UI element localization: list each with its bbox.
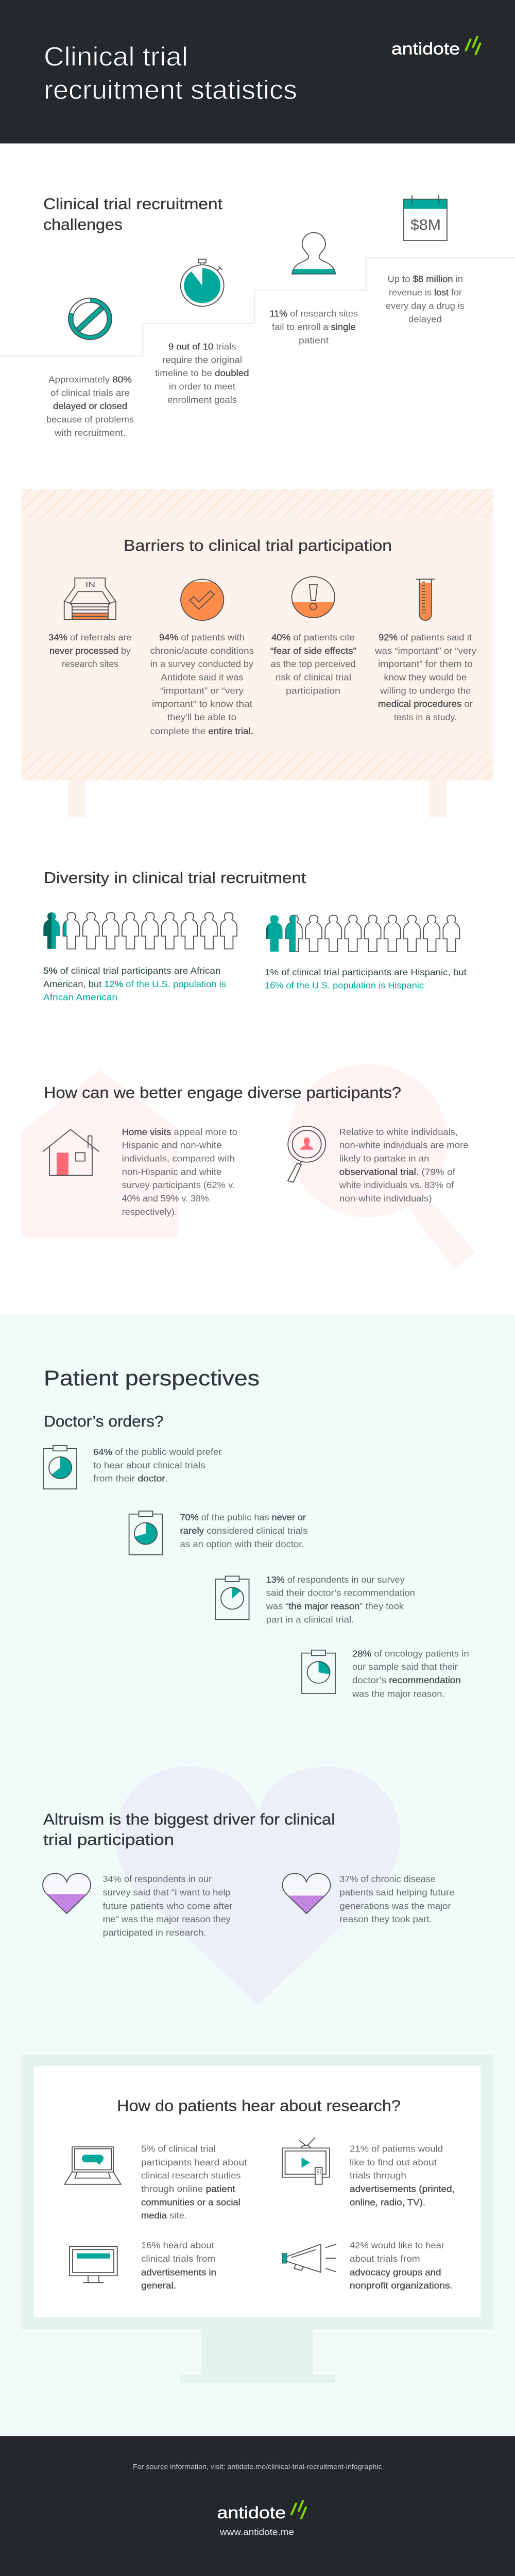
text: 28% of oncology patients: 28% of oncology patients in xyxy=(352,1649,469,1658)
source note: For source information, visit: antidote.me/clinical-trial-recruitment-infographic xyxy=(133,2463,382,2471)
text: observational trial: non-white individuals) xyxy=(339,1193,432,1204)
text: 92% of patients: was “important” or “very xyxy=(374,646,477,656)
text: 9 out of 10 trials: require the original xyxy=(162,355,242,365)
panel: monitor xyxy=(22,2055,493,2383)
text: 5% of participants: clinical research studies xyxy=(141,2171,241,2181)
heading: recruitment challenges: challenges xyxy=(43,216,123,233)
icon: desktop monitor xyxy=(70,2246,117,2283)
heading: hear about research: How do patients hear about research? xyxy=(117,2097,401,2114)
icon: warning circle xyxy=(291,576,335,618)
text: 42% would like: 42% would like to hear xyxy=(350,2241,444,2250)
text: 28% of oncology patients xyxy=(352,1649,469,1699)
icon: inbox tray: IN xyxy=(85,581,95,588)
text: 80% of trials delayed: of clinical trials are xyxy=(50,388,130,398)
heading: altruism: Altruism is the biggest driver for clinical xyxy=(43,1810,335,1828)
text: 34% of respondents: participated in research. xyxy=(103,1927,206,1938)
text: 92% of patients: know they would be xyxy=(384,672,467,682)
text: 80% of trials delayed: because of problems xyxy=(46,414,134,425)
title: recruitment statistics xyxy=(44,75,297,105)
heading: barriers: Barriers to clinical trial participation xyxy=(124,537,392,554)
text: home visits: Home visits appeal more to xyxy=(122,1127,237,1137)
text: home visits: respectively). xyxy=(122,1207,177,1217)
icon: patient silhouette xyxy=(291,232,336,275)
text: African American statistic xyxy=(43,965,226,1003)
heading: engage diverse participants: How can we better engage diverse participants? xyxy=(44,1084,401,1101)
heading: patient perspectives: Patient perspectives xyxy=(44,1366,260,1391)
text: 34% of respondents: me” was the major reason they xyxy=(103,1914,231,1924)
text: 11% of research sites xyxy=(270,309,358,345)
icon: house xyxy=(43,1129,99,1175)
logo: antidote xyxy=(391,40,460,58)
text: observational trial xyxy=(339,1127,469,1204)
text: 70% of the public xyxy=(180,1513,308,1549)
pictogram: Hispanic participants xyxy=(266,915,459,953)
text: 13% of respondents: said their doctor’s recommendation xyxy=(266,1588,415,1598)
text: 9 out of 10 trials: timeline to be doubled xyxy=(155,368,249,378)
text: Hispanic statistic xyxy=(265,967,467,991)
text: 16% heard: 16% heard about xyxy=(141,2241,214,2250)
text: 5% of participants: through online patient xyxy=(141,2184,235,2194)
text: 80% of trials delayed: delayed or closed xyxy=(53,401,127,411)
icon: clipboard 70% xyxy=(129,1511,163,1555)
logo xyxy=(391,37,480,58)
text: 37% of chronic disease patients: reason they took part. xyxy=(339,1914,432,1924)
text: 40% of patients: “fear of side effects” xyxy=(270,646,356,656)
text: 34% of referrals xyxy=(48,632,132,669)
text: 5% of participants: 5% of clinical trial xyxy=(141,2144,216,2154)
icon: television xyxy=(282,2138,330,2184)
text: 94% of patients: 94% of patients with xyxy=(159,632,245,642)
footer band xyxy=(0,2436,515,2576)
text: 92% of patients: tests in a study. xyxy=(394,712,457,722)
icon: check circle xyxy=(179,579,226,621)
background magnifier shape xyxy=(287,1064,475,1269)
text: 40% of patients: as the top perceived xyxy=(271,659,356,669)
text: 13% of respondents: 13% of respondents in our survey xyxy=(266,1574,405,1585)
heading: altruism xyxy=(43,1810,335,1849)
section background: patient perspectives xyxy=(0,1315,515,2436)
text: 37% of chronic disease patients xyxy=(339,1874,455,1924)
staircase line xyxy=(0,258,515,356)
text: 94% of patients: Antidote said it was xyxy=(161,672,244,682)
text: 94% of patients: complete the entire trial. xyxy=(150,726,253,736)
footer logo xyxy=(217,2501,306,2522)
text: $8 million lost: delayed xyxy=(408,314,442,324)
text: 9 out of 10 trials: 9 out of 10 trials xyxy=(168,342,236,351)
text: 94% of patients: important” to know that xyxy=(152,699,252,709)
text: 21% of patients: advertisements (printed, xyxy=(350,2184,455,2194)
text: 34% of referrals: research sites xyxy=(62,659,118,669)
text: 21% of patients: like to find out about xyxy=(350,2157,437,2167)
text: 5% of participants xyxy=(141,2144,247,2221)
text: 21% of patients xyxy=(350,2144,455,2207)
text: 40% of patients xyxy=(270,632,356,696)
text: 40% of patients: 40% of patients cite xyxy=(271,632,355,642)
text: 16% heard: general. xyxy=(141,2280,176,2291)
text: 94% of patients: chronic/acute conditions xyxy=(150,646,254,656)
icon: clipboard 64% xyxy=(43,1446,77,1489)
text: 34% of respondents: future patients who come after xyxy=(103,1901,233,1911)
text: observational trial: observational trial. (79% of xyxy=(339,1167,456,1177)
text: 34% of respondents: 34% of respondents in our xyxy=(103,1874,212,1884)
icon: clipboard 13% xyxy=(215,1576,249,1620)
text: 5% of participants: participants heard about xyxy=(141,2157,247,2167)
text: 16% heard xyxy=(141,2241,216,2291)
icon: heart 37% xyxy=(282,1873,331,1913)
text: 94% of patients: they'll be able to xyxy=(167,712,236,722)
text: 94% of patients: in a survey conducted by xyxy=(150,659,254,669)
text: 11% of research sites: patient xyxy=(299,335,329,345)
text: 42% would like xyxy=(350,2241,453,2291)
text: African American statistic: 5% of clinical trial participants are African xyxy=(43,965,220,976)
text: 64% of the public: from their doctor. xyxy=(93,1473,168,1484)
text: African American statistic: American, but 12% of the U.S. population is xyxy=(43,979,226,989)
text: 28% of oncology patients: was the major reason. xyxy=(352,1689,445,1699)
text: 37% of chronic disease patients: generations was the major xyxy=(339,1901,451,1911)
text: 11% of research sites: fail to enroll a single xyxy=(272,322,356,332)
text: 21% of patients: online, radio, TV). xyxy=(350,2197,425,2207)
text: 40% of patients: risk of clinical trial xyxy=(276,672,351,682)
text: 13% of respondents: was “the major reason” they took xyxy=(266,1601,404,1611)
text: observational trial: likely to partake in an xyxy=(339,1154,430,1163)
text: 11% of research sites: 11% of research sites xyxy=(270,309,358,318)
icon: calendar $8M: $8M xyxy=(410,217,441,233)
title: Clinical trial xyxy=(44,42,188,72)
heading: doctor's orders: Doctor’s orders? xyxy=(44,1413,164,1430)
icon: inbox tray xyxy=(64,578,116,619)
icon: test tube xyxy=(416,579,435,620)
text: $8 million lost xyxy=(386,274,465,324)
text: 64% of the public: 64% of the public would prefer xyxy=(93,1447,221,1457)
text: home visits xyxy=(122,1127,237,1217)
background heart shape xyxy=(115,1767,400,2005)
text: 21% of patients: 21% of patients would xyxy=(350,2144,443,2154)
heading: altruism: trial participation xyxy=(43,1831,174,1849)
text: 40% of patients: participation xyxy=(286,686,340,696)
text: 94% of patients: “important” or “very xyxy=(160,686,244,696)
text: 70% of the public: 70% of the public has never or xyxy=(180,1513,306,1522)
text: 64% of the public xyxy=(93,1447,221,1484)
text: 80% of trials delayed: Approximately 80% xyxy=(48,375,132,384)
text: 9 out of 10 trials: enrollment goals xyxy=(167,395,237,405)
text: Hispanic statistic: 16% of the U.S. population is Hispanic xyxy=(265,980,424,991)
text: 5% of participants: media site. xyxy=(141,2211,187,2221)
text: $8 million lost: Up to $8 million in xyxy=(387,274,463,284)
icon: laptop xyxy=(65,2147,121,2184)
text: 37% of chronic disease patients: 37% of chronic disease xyxy=(339,1874,436,1884)
footer logo: antidote xyxy=(217,2504,286,2522)
text: 92% of patients: medical procedures or xyxy=(378,699,473,709)
icon: megaphone xyxy=(282,2244,336,2273)
text: home visits: individuals, compared with xyxy=(122,1154,235,1163)
pictogram: African American participants xyxy=(43,912,237,950)
website: www.antidote.me xyxy=(219,2527,294,2537)
text: home visits: non-Hispanic and white xyxy=(122,1167,222,1177)
icon: heart 34% xyxy=(43,1873,91,1913)
text: 16% heard: advertisements in xyxy=(141,2267,216,2277)
icon: stopwatch xyxy=(181,259,224,307)
text: African American statistic: African American xyxy=(43,992,117,1003)
text: 13% of respondents xyxy=(266,1574,415,1624)
text: 92% of patients: 92% of patients said it xyxy=(379,632,472,642)
panel: barriers billboard xyxy=(22,489,493,818)
text: observational trial: Relative to white individuals, xyxy=(339,1127,458,1137)
title xyxy=(44,42,297,105)
text: 34% of respondents: survey said that “I want to help xyxy=(103,1887,231,1897)
text: observational trial: white individuals vs. 83% of xyxy=(339,1180,454,1190)
text: 21% of patients: trials through xyxy=(350,2171,406,2181)
text: 80% of trials delayed xyxy=(46,375,134,438)
icon: calendar $8M xyxy=(404,195,447,241)
text: 92% of patients xyxy=(374,632,477,722)
text: 70% of the public: as an option with their doctor. xyxy=(180,1539,304,1549)
text: 28% of oncology patients: doctor’s recommendation xyxy=(352,1675,461,1685)
icon: clipboard 28% xyxy=(302,1650,335,1693)
heading: diversity: Diversity in clinical trial recruitment xyxy=(44,869,306,887)
text: 34% of referrals: 34% of referrals are xyxy=(48,632,132,642)
text: home visits: survey participants (62% v. xyxy=(122,1180,235,1190)
heading: recruitment challenges: Clinical trial recruitment xyxy=(43,195,222,213)
text: 5% of participants: communities or a social xyxy=(141,2197,241,2207)
text: 42% would like: about trials from xyxy=(350,2253,420,2264)
text: 92% of patients: important” for them to xyxy=(378,659,473,669)
text: 70% of the public: rarely considered clinical trials xyxy=(180,1526,308,1536)
text: 9 out of 10 trials: in order to meet xyxy=(169,381,235,392)
text: 34% of referrals: never processed by xyxy=(49,646,131,656)
text: 42% would like: advocacy groups and xyxy=(350,2267,441,2277)
text: 92% of patients: willing to undergo the xyxy=(380,686,471,696)
heading: recruitment challenges xyxy=(43,195,222,233)
text: 64% of the public: to hear about clinical trials xyxy=(93,1460,205,1470)
text: Hispanic statistic: 1% of clinical trial participants are Hispanic, but xyxy=(265,967,467,977)
text: 9 out of 10 trials xyxy=(155,342,249,405)
text: 37% of chronic disease patients: patients said helping future xyxy=(339,1887,455,1897)
text: 94% of patients xyxy=(150,632,254,736)
text: 34% of respondents xyxy=(103,1874,233,1938)
icon: prohibited sign xyxy=(68,298,112,340)
text: 80% of trials delayed: with recruitment. xyxy=(54,428,126,438)
icon: magnifying glass xyxy=(288,1126,325,1182)
header band xyxy=(0,0,515,143)
text: $8 million lost: revenue is lost for xyxy=(389,287,462,298)
background house shape xyxy=(22,1070,178,1237)
text: 28% of oncology patients: our sample said that their xyxy=(352,1662,458,1672)
text: 13% of respondents: part in a clinical trial. xyxy=(266,1615,354,1624)
text: observational trial: non-white individuals are more xyxy=(339,1140,469,1150)
text: home visits: 40% and 59% v. 38% xyxy=(122,1193,209,1204)
text: 42% would like: nonprofit organizations. xyxy=(350,2280,453,2291)
text: home visits: Hispanic and non-white xyxy=(122,1140,222,1150)
text: $8 million lost: every day a drug is xyxy=(386,301,465,311)
text: 16% heard: clinical trials from xyxy=(141,2253,215,2264)
